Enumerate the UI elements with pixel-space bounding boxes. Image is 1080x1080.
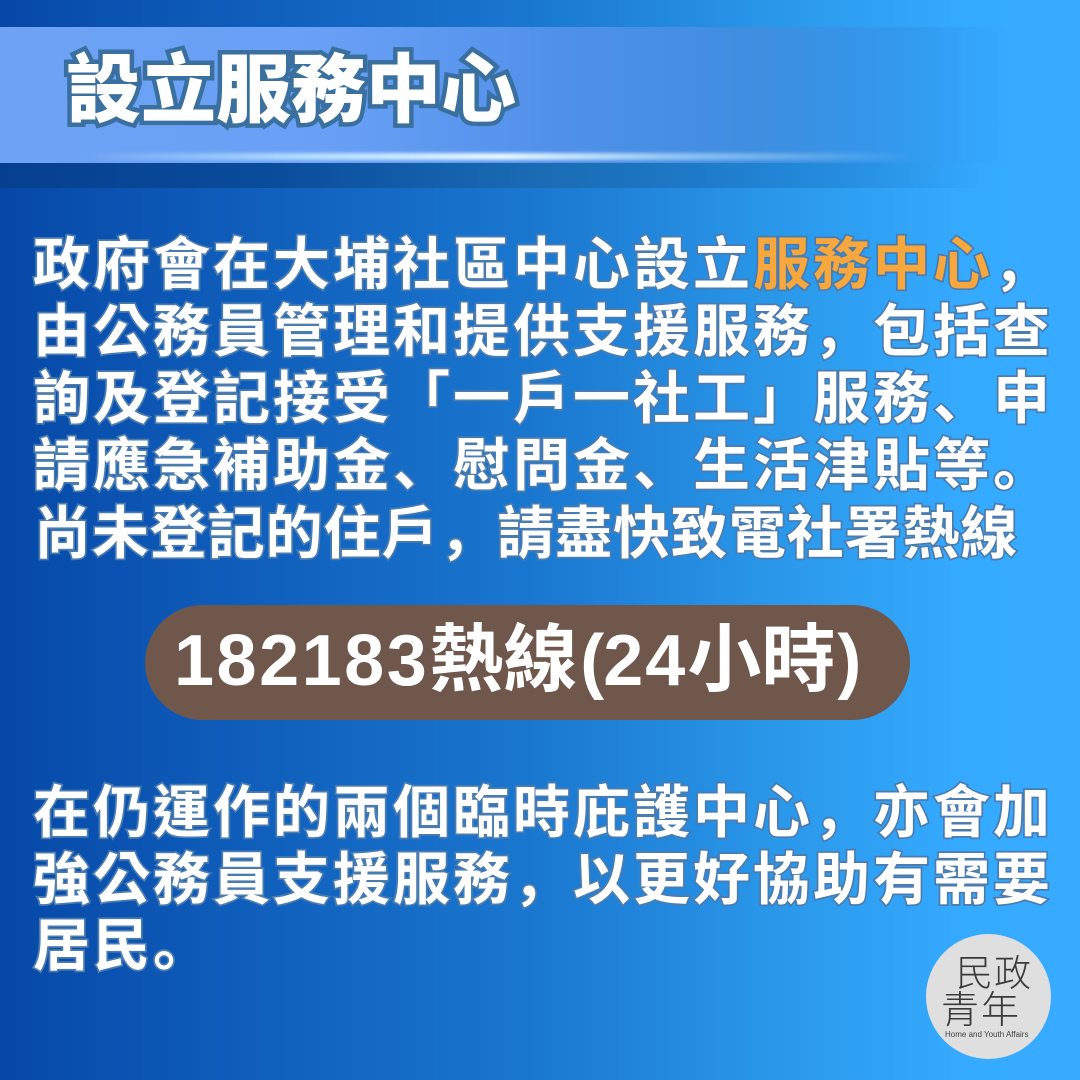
paragraph: temporary shelters: 居民。 bbox=[33, 900, 213, 982]
paragraph: temporary shelters bbox=[32, 767, 1053, 982]
paragraph: temporary shelters: 強公務員支援服務，以更好協助有需要 bbox=[33, 834, 1053, 916]
paragraph: service centre details: 詢及登記接受「一戶一社工」服務、申 bbox=[33, 353, 1053, 435]
banner light band bbox=[0, 27, 1080, 163]
hotline pill bbox=[145, 605, 910, 720]
paragraph: service centre details: 請應急補助金、慰問金、生活津貼等。 bbox=[33, 420, 1053, 502]
logo english caption: Home and Youth Affairs bbox=[945, 1030, 1028, 1039]
banner dark shadow band bbox=[0, 163, 1080, 188]
paragraph: service centre details: 政府會在大埔社區中心設立服務中心， bbox=[33, 219, 1053, 301]
paragraph: temporary shelters: 在仍運作的兩個臨時庇護中心，亦會加 bbox=[33, 767, 1053, 849]
logo: Home and Youth Affairs bbox=[926, 934, 1051, 1059]
paragraph: service centre details bbox=[32, 219, 1053, 570]
logo characters lower: 青年 bbox=[941, 979, 1021, 1034]
logo characters upper: 民政 bbox=[956, 943, 1032, 997]
title text: 設立服務中心 bbox=[66, 48, 516, 132]
paragraph: service centre details: 尚未登記的住戶，請盡快致電社署熱線 bbox=[34, 488, 1018, 570]
title banner bbox=[0, 27, 946, 188]
banner glow line bbox=[0, 153, 1000, 160]
paragraph: service centre details: 由公務員管理和提供支援服務，包括查 bbox=[33, 286, 1053, 368]
hotline text: 182183熱線(24小時) bbox=[174, 618, 864, 701]
